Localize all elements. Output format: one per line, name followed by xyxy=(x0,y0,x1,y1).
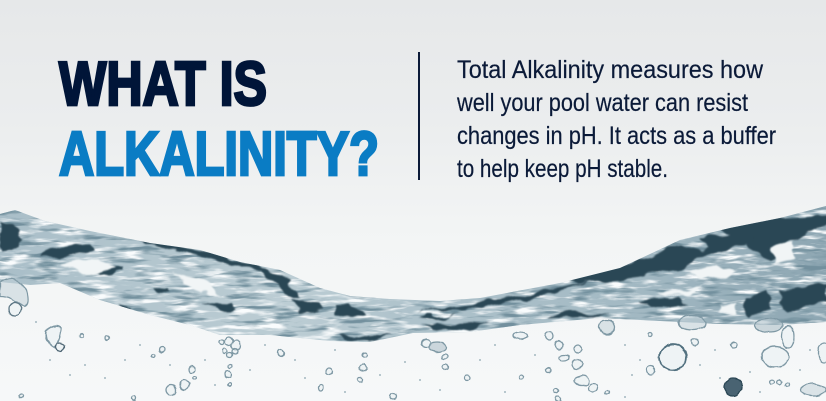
description text: well your pool water can resist xyxy=(456,89,748,117)
water wave xyxy=(0,200,826,350)
description text: to help keep pH stable. xyxy=(457,155,668,183)
description text xyxy=(456,56,776,183)
title xyxy=(59,50,379,189)
vertical divider xyxy=(418,52,420,180)
description text: Total Alkalinity measures how xyxy=(457,56,764,84)
title: ALKALINITY? xyxy=(59,120,379,189)
title: WHAT IS xyxy=(59,50,267,119)
bubbles xyxy=(0,279,826,401)
fine droplets xyxy=(35,321,811,398)
description text: changes in pH. It acts as a buffer xyxy=(457,122,776,150)
